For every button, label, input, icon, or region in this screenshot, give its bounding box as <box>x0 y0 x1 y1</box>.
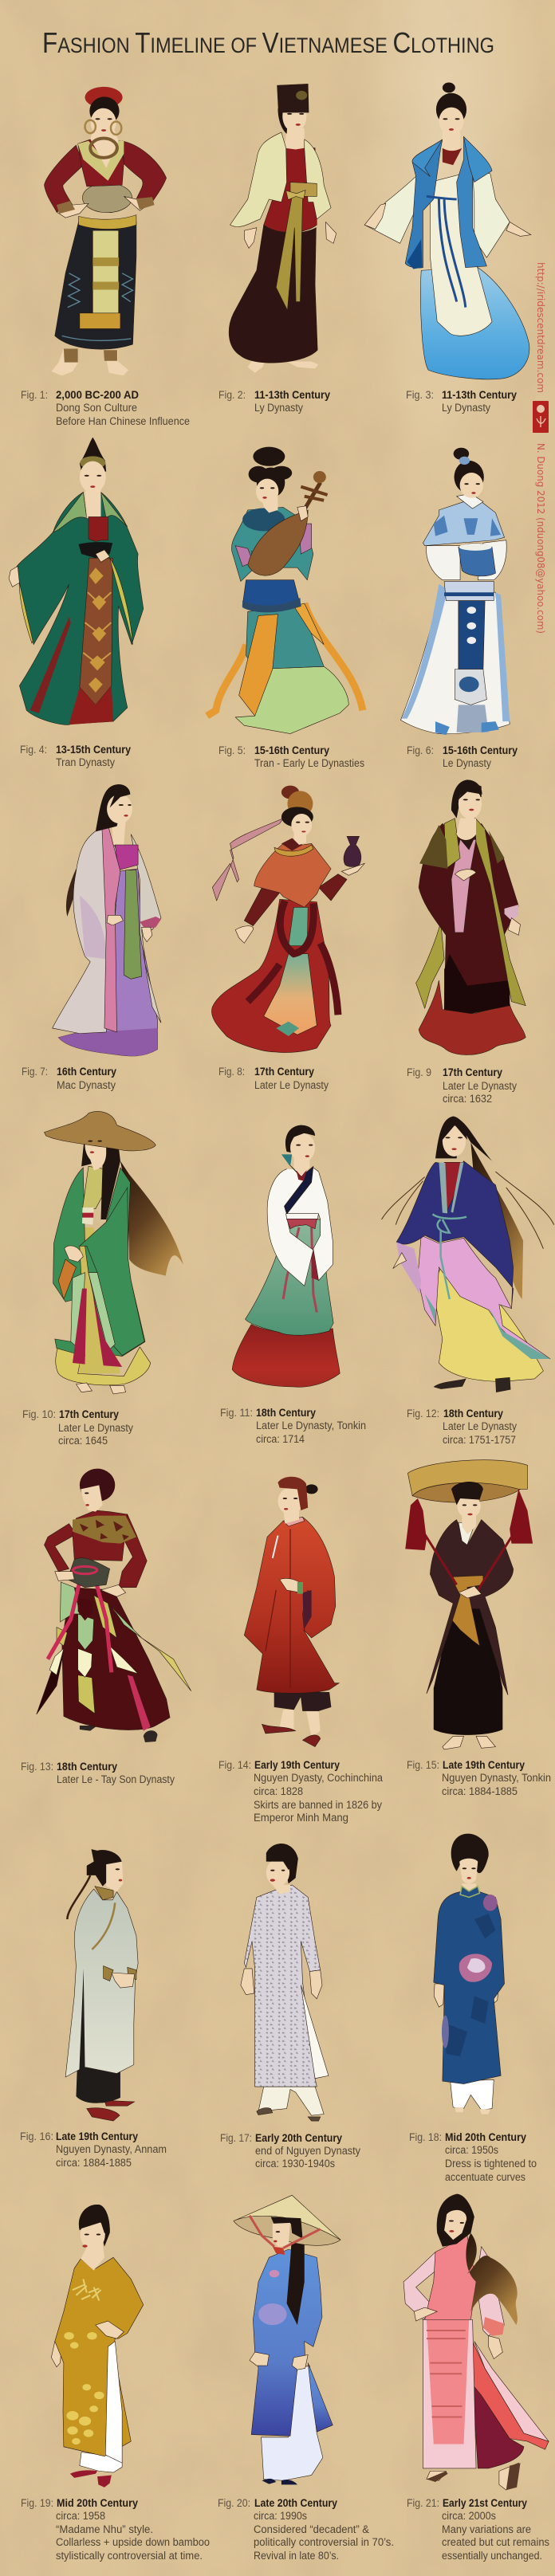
caption: fig 21 <box>407 2497 549 2562</box>
caption: fig 4: 13-15th Century <box>56 744 131 756</box>
artist website watermark: http://iridescentdream.com <box>535 262 546 393</box>
caption: fig 9: Fig. 9 <box>407 1066 431 1078</box>
caption: fig 14: Early 19th Century <box>254 1759 340 1771</box>
caption: fig 19: Mid 20th Century <box>57 2497 138 2509</box>
caption: fig 5: Tran - Early Le Dynasties <box>254 757 364 769</box>
caption: fig 8: 17th Century <box>254 1066 314 1078</box>
caption: fig 20: Revival in late 80’s. <box>254 2550 339 2562</box>
caption: fig 11: Later Le Dynasty, Tonkin <box>256 1420 366 1431</box>
row 7 figures <box>51 2194 549 2490</box>
caption: fig 21: circa: 2000s <box>442 2510 496 2522</box>
caption: fig 8: Later Le Dynasty <box>254 1079 329 1091</box>
row 1 figures <box>44 83 531 379</box>
caption: fig 19 <box>21 2497 210 2562</box>
figure 19: Madame Nhu style <box>51 2205 144 2488</box>
caption: fig 14: Fig. 14: <box>218 1759 251 1771</box>
caption: fig 3: Fig. 3: <box>406 389 434 401</box>
caption: fig 6 <box>407 744 518 769</box>
artist seal stamp <box>533 401 549 433</box>
caption: fig 7: Mac Dynasty <box>57 1079 116 1091</box>
caption: fig 12: circa: 1751-1757 <box>443 1434 516 1446</box>
caption: fig 19: Fig. 19: <box>21 2497 53 2509</box>
caption: fig 12: Later Le Dynasty <box>443 1420 517 1432</box>
caption: fig 1 <box>21 389 190 427</box>
caption: fig 7: 16th Century <box>57 1066 116 1078</box>
caption: fig 18: Dress is tightened to <box>445 2158 537 2170</box>
caption: fig 13 <box>21 1761 175 1785</box>
caption: fig 10: circa: 1645 <box>58 1435 108 1447</box>
caption: fig 10: Fig. 10: <box>22 1408 56 1420</box>
caption: fig 15: Nguyen Dynasty, Tonkin <box>442 1772 551 1784</box>
caption: fig 4: Tran Dynasty <box>56 756 115 768</box>
caption: fig 11: 18th Century <box>256 1407 316 1419</box>
caption: fig 20: Considered “decadent” & <box>254 2523 369 2535</box>
caption: fig 8 <box>218 1066 329 1091</box>
figure 20: Late 20th Century ao dai with conical hat <box>234 2195 340 2484</box>
caption: fig 15: Fig. 15: <box>407 1759 439 1771</box>
caption: fig 19: Collarless + upside down bamboo <box>56 2536 210 2548</box>
caption: fig 3: Ly Dynasty <box>442 402 490 414</box>
figure 7: Mac Dynasty <box>53 784 161 1056</box>
caption: fig 14: Skirts are banned in 1826 by <box>254 1799 382 1811</box>
caption: fig 18: Fig. 18: <box>409 2131 442 2143</box>
caption: fig 10 <box>22 1408 133 1447</box>
caption: fig 6: Fig. 6: <box>407 744 434 756</box>
figure 3: Ly Dynasty blue <box>364 83 531 379</box>
caption: fig 16: Nguyen Dynasty, Annam <box>56 2143 167 2155</box>
caption: fig 17 <box>220 2132 360 2170</box>
row 2 figures <box>9 438 510 735</box>
caption: fig 5: Fig. 5: <box>218 744 246 756</box>
caption: fig 14: circa: 1828 <box>254 1785 303 1797</box>
row 4 figures <box>44 1112 554 1394</box>
caption: fig 3: 11-13th Century <box>442 389 517 401</box>
figure 17: end of Nguyen Dynasty <box>241 1844 329 2121</box>
caption: fig 12 <box>407 1408 517 1446</box>
caption: fig 14: Nguyen Dyasty, Cochinchina <box>254 1772 383 1784</box>
figure 6: Le Dynasty <box>400 448 510 735</box>
caption: fig 1: Fig. 1: <box>21 389 48 401</box>
caption: fig 20 <box>218 2497 394 2562</box>
caption: fig 2 <box>218 389 330 414</box>
row 3 figures <box>53 779 525 1056</box>
figure 21: Early 21st Century <box>403 2194 549 2490</box>
caption: fig 5: 15-16th Century <box>254 744 329 756</box>
caption: fig 21: Fig. 21: <box>407 2497 439 2509</box>
caption: fig 21: Early 21st Century <box>443 2497 527 2509</box>
row 6 figures <box>65 1834 505 2121</box>
caption: fig 2: 11-13th Century <box>254 389 330 401</box>
figure 13: Later Le - Tay Son Dynasty <box>37 1469 191 1742</box>
caption: fig 19: “Madame Nhu” style. <box>56 2523 153 2535</box>
caption: fig 20: politically controversial in 70’s. <box>254 2536 394 2548</box>
caption: fig 20: circa: 1990s <box>254 2510 307 2522</box>
caption: fig 12: 18th Century <box>443 1408 503 1420</box>
figure 15: Nguyen Dynasty, Tonkin <box>405 1460 533 1749</box>
figure 10: Later Le Dynasty straw hat <box>44 1112 183 1394</box>
caption: fig 4 <box>20 744 131 768</box>
caption: fig 17: Fig. 17: <box>220 2132 252 2144</box>
caption: fig 11: Fig. 11: <box>220 1407 253 1419</box>
caption: fig 2: Ly Dynasty <box>254 402 303 414</box>
caption: fig 4: Fig. 4: <box>20 744 47 756</box>
caption: fig 9: 17th Century <box>443 1066 502 1078</box>
caption: fig 16: circa: 1884-1885 <box>56 2157 132 2169</box>
caption: fig 21: Many variations are <box>442 2523 531 2535</box>
caption: fig 13: Later Le - Tay Son Dynasty <box>57 1773 175 1785</box>
row 5 figures <box>37 1460 533 1749</box>
caption: fig 19: stylistically controversial at time. <box>56 2550 203 2562</box>
caption: fig 17: end of Nguyen Dynasty <box>255 2145 360 2157</box>
caption: fig 14 <box>218 1759 383 1824</box>
figure 5: Tran - Early Le Dynasties <box>207 447 363 734</box>
caption: fig 16 <box>20 2130 167 2169</box>
figure 18: Mid 20th Century circa 1950s <box>434 1834 505 2114</box>
caption: fig 1: Dong Son Culture <box>56 402 137 414</box>
caption: fig 17: circa: 1930-1940s <box>255 2158 335 2170</box>
caption: fig 15 <box>407 1759 551 1797</box>
figure 2: Ly Dynasty <box>229 84 337 373</box>
caption: fig 13: 18th Century <box>57 1761 117 1773</box>
caption: fig 20: Late 20th Century <box>254 2497 337 2509</box>
title: FASHION TIMELINE OF VIETNAMESE CLOTHING <box>42 26 494 59</box>
caption: fig 6: 15-16th Century <box>443 744 518 756</box>
caption: fig 12: Fig. 12: <box>407 1408 439 1420</box>
caption: fig 11 <box>220 1407 366 1445</box>
caption: fig 7 <box>22 1066 116 1091</box>
caption: fig 14: Emperor Minh Mang <box>254 1812 348 1824</box>
caption: fig 1: 2,000 BC-200 AD <box>56 389 139 401</box>
caption: fig 10: Later Le Dynasty <box>58 1422 133 1434</box>
caption: fig 7: Fig. 7: <box>22 1066 48 1078</box>
caption: fig 19: circa: 1958 <box>56 2510 105 2522</box>
figure 11: Later Le Dynasty, Tonkin <box>232 1125 340 1387</box>
figure 14: Nguyen Dynasty, Cochinchina <box>244 1477 339 1747</box>
caption: fig 20: Fig. 20: <box>218 2497 250 2509</box>
caption: fig 9: Later Le Dynasty <box>443 1080 517 1092</box>
figure 12: Later Le Dynasty circa 1751-1757 <box>382 1117 554 1392</box>
caption: fig 21: essentially unchanged. <box>442 2550 542 2562</box>
figure 8: Later Le Dynasty with vase <box>211 786 364 1053</box>
caption: fig 13: Fig. 13: <box>21 1761 53 1773</box>
caption: fig 10: 17th Century <box>59 1408 119 1420</box>
caption: fig 11: circa: 1714 <box>256 1433 305 1445</box>
caption: fig 6: Le Dynasty <box>443 757 491 769</box>
caption: fig 18 <box>409 2131 537 2183</box>
caption: fig 18: accentuate curves <box>445 2171 525 2183</box>
caption: fig 1: Before Han Chinese Influence <box>56 415 190 427</box>
caption: fig 18: circa: 1950s <box>445 2144 498 2156</box>
caption: fig 9 <box>407 1066 517 1105</box>
artist credit: N. Duong 2012 (nduong08@yahoo.com) <box>535 443 546 634</box>
caption: fig 2: Fig. 2: <box>218 389 246 401</box>
figure 16: Nguyen Dynasty, Annam <box>65 1849 138 2121</box>
caption: fig 17: Early 20th Century <box>255 2132 342 2144</box>
caption: fig 16: Fig. 16: <box>20 2130 53 2142</box>
caption: fig 5 <box>218 744 364 769</box>
caption: fig 9: circa: 1632 <box>443 1093 492 1105</box>
caption: fig 15: circa: 1884-1885 <box>442 1785 518 1797</box>
figure 4: Tran Dynasty <box>9 438 144 724</box>
caption: fig 21: created but cut remains <box>442 2536 549 2548</box>
caption: fig 15: Late 19th Century <box>443 1759 525 1771</box>
caption: fig 8: Fig. 8: <box>218 1066 245 1078</box>
caption: fig 16: Late 19th Century <box>56 2130 138 2142</box>
figure 1: Dong Son Culture <box>44 87 167 375</box>
caption: fig 3 <box>406 389 517 414</box>
caption: fig 18: Mid 20th Century <box>445 2131 526 2143</box>
figure 9: Later Le Dynasty circa 1632 <box>416 779 525 1055</box>
